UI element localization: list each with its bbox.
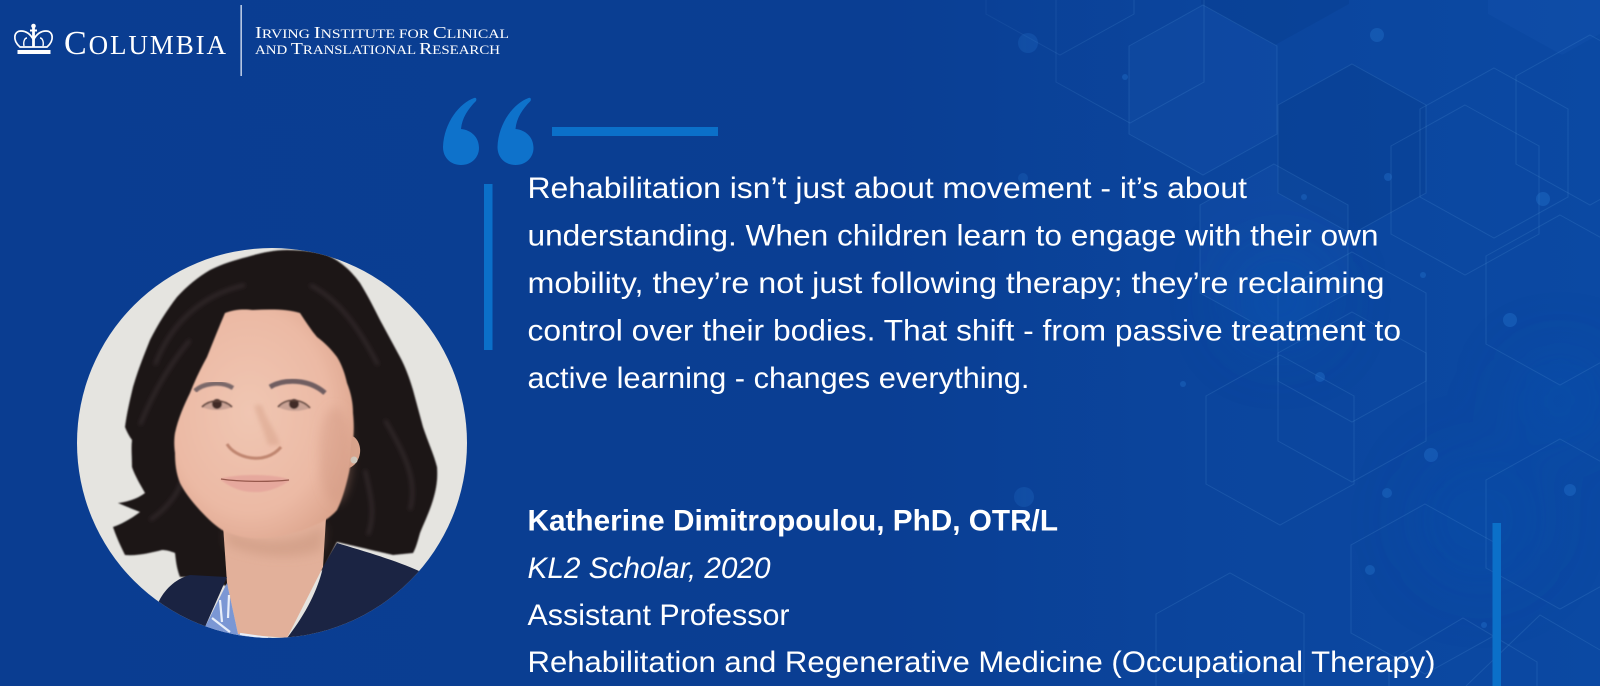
- name: Katherine Dimitropoulou, PhD, OTR/L: [528, 504, 1058, 538]
- icon: Columbia crown: [15, 24, 52, 54]
- nose shading: [227, 444, 281, 458]
- department: Rehabilitation and Regenerative Medicine (Occupational Therapy): [528, 646, 1436, 679]
- quote text: active learning - changes everything.: [528, 362, 1030, 395]
- jacket: [158, 575, 227, 626]
- hair: [113, 250, 437, 586]
- cheek shading: [319, 407, 351, 503]
- attribution: [528, 504, 1436, 679]
- job title: Assistant Professor: [528, 599, 790, 632]
- quote top rule: [552, 127, 718, 136]
- opening quote mark: [443, 98, 534, 165]
- quote text: Rehabilitation isn’t just about movement - it’s about: [528, 172, 1247, 205]
- right eyebrow: [270, 381, 325, 393]
- blouse pattern: [212, 595, 268, 638]
- portrait photo: [77, 248, 467, 650]
- left eye: [202, 399, 232, 410]
- institute name: AND TRANSLATIONAL RESEARCH: [255, 39, 500, 58]
- blouse: [206, 583, 272, 638]
- quote text: [528, 172, 1401, 395]
- quote text: understanding. When children learn to engage with their own: [528, 220, 1378, 252]
- Columbia wordmark: COLUMBIA: [64, 25, 226, 62]
- logo divider: [240, 5, 242, 76]
- earring: [350, 456, 358, 464]
- neck: [223, 518, 326, 638]
- institute name: IRVING INSTITUTE FOR CLINICAL: [255, 23, 509, 42]
- left eyebrow: [195, 384, 233, 391]
- photo backdrop: [77, 248, 467, 638]
- bottom right bar: [1492, 523, 1501, 686]
- quote text: control over their bodies. That shift - from passive treatment to: [528, 314, 1401, 348]
- lips: [220, 475, 290, 492]
- right eye: [278, 399, 310, 411]
- institute name: [255, 23, 509, 58]
- face: [174, 309, 354, 538]
- scholar line: KL2 Scholar, 2020: [528, 552, 771, 585]
- quote left bar: [484, 184, 492, 350]
- ear: [349, 436, 360, 468]
- quote text: mobility, they’re not just following therapy; they’re reclaiming: [528, 267, 1384, 300]
- background hexagon pattern: [986, 0, 1600, 686]
- logo: Columbia Irving Institute: [15, 5, 509, 76]
- hair highlights: [140, 285, 412, 535]
- neck shadow: [226, 525, 324, 556]
